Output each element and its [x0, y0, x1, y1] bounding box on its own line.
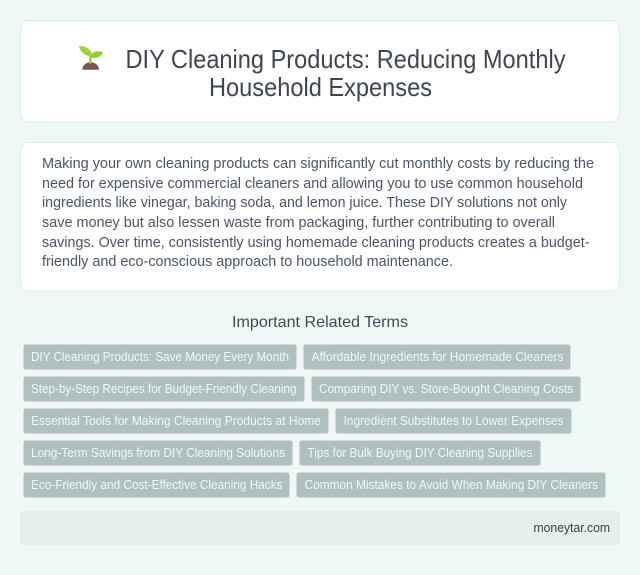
tag: [336, 408, 572, 434]
tag: [24, 344, 296, 370]
tag: Tips for Bulk Buying DIY Cleaning Supplies: [308, 445, 532, 460]
intro paragraph: savings. Over time, consistently using homemade cleaning products creates a budget-: [42, 234, 590, 251]
intro paragraph: need for expensive commercial cleaners and allowing you to use common household: [42, 175, 583, 192]
heading: related terms: Important Related Terms: [232, 314, 408, 331]
intro paragraph: [42, 155, 594, 270]
tag: Common Mistakes to Avoid When Making DIY Cleaners: [304, 477, 598, 492]
tag: Comparing DIY vs. Store-Bought Cleaning Costs: [319, 381, 573, 396]
intro paragraph: save money but also lessen waste from packaging, further contributing to overall: [42, 214, 555, 231]
intro paragraph: ingredients like vinegar, baking soda, and lemon juice. These DIY solutions not only: [42, 194, 567, 211]
tag: Affordable Ingredients for Homemade Cleaners: [312, 349, 564, 364]
footer: [20, 511, 620, 545]
intro paragraph: Making your own cleaning products can significantly cut monthly costs by reducing the: [42, 155, 594, 172]
tag: [296, 472, 606, 498]
tag: [24, 472, 290, 498]
footer site name: moneytar.com: [534, 520, 610, 535]
tag: [304, 344, 570, 370]
tag list: [24, 344, 606, 498]
title: DIY Cleaning Products: Reducing Monthly: [126, 46, 566, 74]
tag: Essential Tools for Making Cleaning Products at Home: [31, 413, 321, 428]
tag: Ingredient Substitutes to Lower Expenses: [344, 413, 564, 428]
title: [126, 46, 566, 102]
panel: intro text: [20, 142, 620, 291]
tag: [24, 376, 304, 402]
panel: header: [20, 20, 620, 122]
title: Household Expenses: [209, 74, 432, 102]
tag: [24, 440, 292, 466]
icon: sprout: [79, 46, 103, 70]
tag: Eco-Friendly and Cost-Effective Cleaning Hacks: [31, 477, 282, 492]
tag: [312, 376, 580, 402]
tag: DIY Cleaning Products: Save Money Every Month: [31, 349, 289, 364]
tag: Step-by-Step Recipes for Budget-Friendly Cleaning: [31, 381, 296, 396]
tag: [24, 408, 328, 434]
intro paragraph: friendly and eco-conscious approach to household maintenance.: [42, 253, 453, 270]
tag: Long-Term Savings from DIY Cleaning Solutions: [31, 445, 285, 460]
tag: [300, 440, 540, 466]
